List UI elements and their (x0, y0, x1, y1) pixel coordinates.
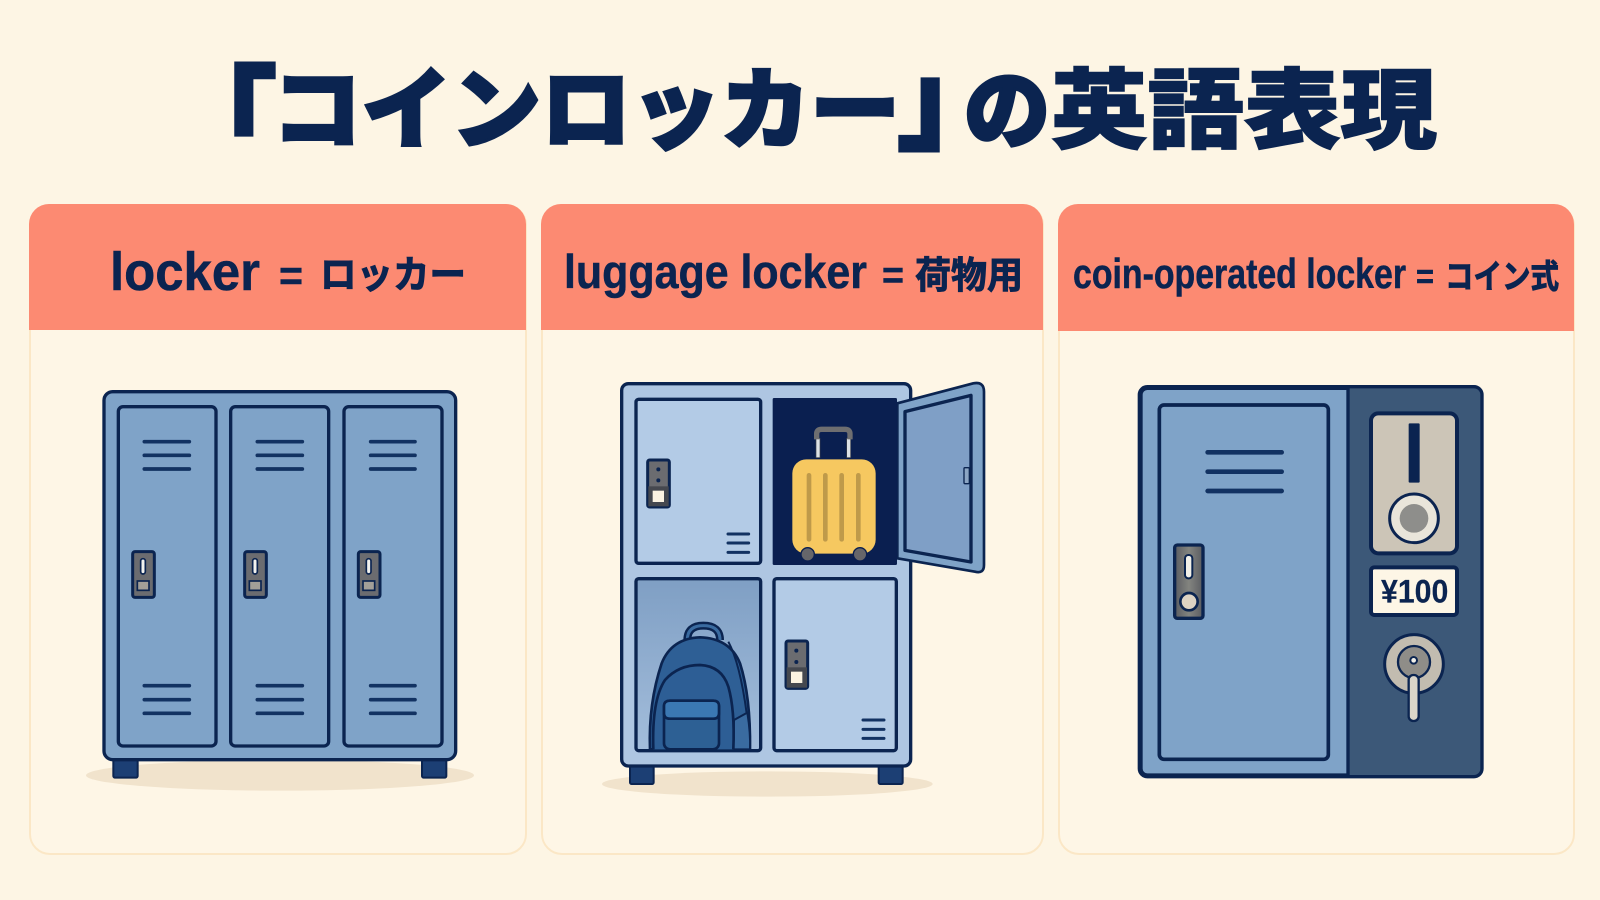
panel card (1059, 206, 1574, 854)
panel: locker (29, 204, 526, 854)
heading: ロッカー (320, 244, 466, 299)
icon: suitcase (792, 429, 876, 561)
title: 「 (164, 29, 277, 193)
price tag (1371, 567, 1457, 615)
heading: locker (110, 242, 260, 302)
feet (113, 758, 446, 778)
heading: コイン式 (1445, 250, 1559, 298)
header band (541, 204, 1043, 330)
title (164, 9, 1437, 193)
floor shadow (602, 771, 933, 797)
heading: = (882, 255, 904, 297)
panel card (30, 205, 526, 854)
heading: luggage locker (564, 245, 867, 298)
title: 」 (897, 9, 1010, 173)
left door (118, 407, 216, 746)
icon: key lock (1385, 635, 1443, 721)
floor shadow (86, 760, 474, 791)
upper left door (636, 399, 761, 563)
middle door (231, 407, 329, 746)
lower left compartment (636, 579, 761, 751)
illustration: three lockers (86, 392, 474, 791)
cabinet body (622, 384, 911, 766)
panel: coin-operated locker (1058, 204, 1574, 854)
header band (29, 204, 526, 330)
locker door (1159, 405, 1328, 759)
panel: luggage locker (541, 204, 1043, 854)
open compartment (773, 398, 897, 565)
heading: 荷物用 (915, 245, 1023, 299)
illustration: coin locker (1139, 387, 1482, 777)
heading: = (1416, 258, 1434, 296)
right door (344, 407, 442, 746)
feet (630, 763, 903, 784)
header band (1058, 204, 1574, 331)
panel card (542, 205, 1043, 854)
price tag: ¥100 (1381, 574, 1448, 610)
illustration: four-door locker with luggage (602, 383, 984, 797)
title: の (964, 41, 1050, 166)
title: 英語表現 (1051, 41, 1437, 167)
icon: backpack (650, 626, 750, 749)
lower right door (774, 579, 896, 751)
cabinet body (104, 392, 456, 760)
title: コインロッカー (272, 40, 900, 167)
coin slot plate (1371, 413, 1457, 553)
heading: = (279, 252, 303, 299)
cabinet (1139, 387, 1482, 777)
open door (897, 383, 984, 572)
heading (110, 242, 466, 302)
heading: coin-operated locker (1073, 250, 1406, 297)
